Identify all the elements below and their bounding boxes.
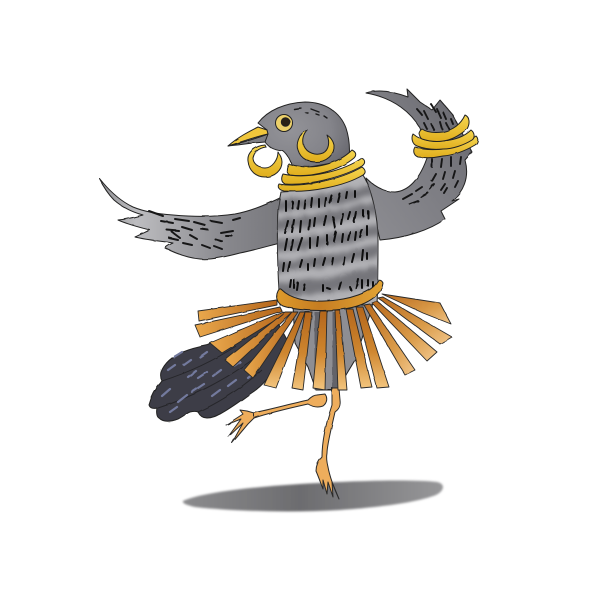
right strips [356, 294, 452, 388]
tail feather lines [158, 346, 262, 412]
head [228, 102, 350, 170]
small hanging earring [248, 145, 282, 177]
body wash bands [272, 188, 385, 290]
beak [228, 127, 268, 146]
body feather marks [283, 191, 373, 291]
right wing feather marks [403, 104, 461, 204]
left wing feather marks [149, 211, 240, 249]
skirt fringe strips [195, 294, 452, 390]
bird figure [99, 89, 478, 499]
right wing [366, 89, 472, 240]
standing leg [316, 388, 340, 499]
illustration: dancing bird [99, 88, 479, 513]
left wing [99, 178, 284, 259]
tail [149, 318, 290, 421]
ground shadow [183, 481, 443, 511]
raised leg [226, 394, 327, 443]
tail blue dashes [162, 352, 253, 412]
left strips [195, 300, 312, 390]
centre strips [313, 309, 372, 390]
body [272, 175, 385, 305]
right wrist bracelets [412, 115, 478, 158]
large crescent earring [297, 130, 334, 162]
head markings [294, 108, 327, 118]
eye [276, 114, 292, 132]
neck collars [278, 150, 365, 191]
lower body under skirt [293, 305, 373, 390]
raised foot toes [226, 410, 254, 443]
skirt waistband [277, 280, 383, 311]
